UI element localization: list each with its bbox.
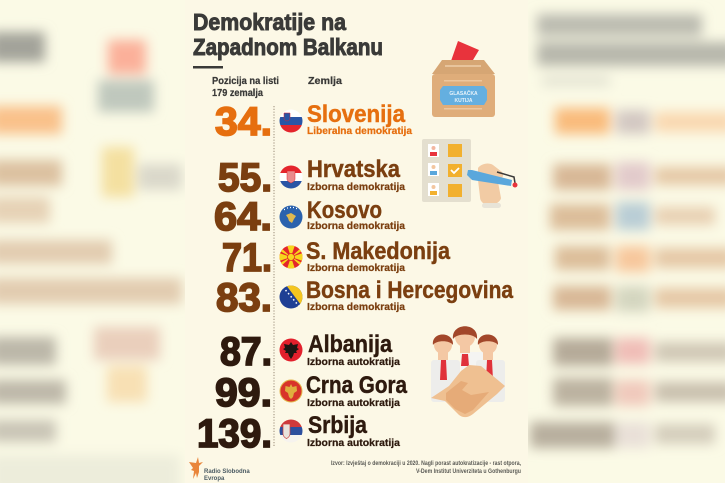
flag: Montenegro	[280, 380, 302, 402]
flag: Serbia	[280, 420, 302, 439]
country name: Hrvatska	[307, 156, 401, 183]
title rule	[193, 66, 223, 68]
regime type: Izborna autokratija	[307, 398, 400, 409]
rank 99: 99.	[215, 371, 272, 415]
flag: Croatia	[280, 166, 302, 188]
title: Demokratije na	[193, 9, 346, 35]
rank 55: 55.	[218, 156, 272, 200]
blurred backdrop: right	[530, 14, 725, 448]
icon: checklist and hand	[422, 139, 518, 208]
country name: Kosovo	[307, 197, 382, 224]
country name: Bosna i Hercegovina	[306, 277, 514, 304]
flag: North Macedonia	[280, 246, 302, 268]
row: Srbija	[198, 415, 400, 448]
country name: Crna Gora	[306, 372, 408, 399]
row: Hrvatska	[218, 159, 406, 192]
country name: Slovenija	[307, 101, 406, 128]
regime type: Izborna autokratija	[307, 357, 400, 368]
row: Albanija	[220, 330, 400, 374]
regime type: Izborna autokratija	[307, 438, 400, 449]
dotted divider	[273, 106, 275, 447]
regime type: Izborna demokratija	[307, 182, 405, 193]
regime type: Izborna demokratija	[307, 302, 405, 313]
title	[193, 9, 383, 60]
regime type: Izborna demokratija	[307, 263, 405, 274]
rank 87: 87.	[220, 330, 272, 374]
row: Crna Gora	[215, 371, 408, 415]
row: S. Makedonija	[222, 241, 450, 274]
country name: S. Makedonija	[306, 238, 451, 265]
column heading: position: 179 zemalja	[212, 88, 263, 99]
regime type: Liberalna demokratija	[307, 126, 412, 137]
flag: Slovenia	[280, 110, 302, 132]
rank 71: 71.	[222, 236, 272, 280]
title: Zapadnom Balkanu	[193, 34, 383, 60]
rank 83: 83.	[216, 276, 272, 320]
logo: Radio Slobodna Evropa: Radio Slobodna	[204, 469, 250, 475]
regime type: Izborna demokratija	[307, 221, 405, 232]
flag: Kosovo	[280, 206, 302, 228]
source note: V-Dem Institut Univerziteta u Gothenburgu	[416, 469, 521, 475]
icon: handshake team	[431, 326, 505, 417]
rank 139: 139.	[197, 412, 272, 456]
country name: Srbija	[308, 412, 368, 439]
column heading: country: Zemlja	[308, 75, 342, 87]
source note	[331, 461, 521, 475]
rank 64: 64.	[214, 195, 272, 239]
logo: Radio Slobodna Evropa	[189, 457, 250, 482]
blurred backdrop: left	[0, 32, 182, 483]
icon: ballot box	[432, 41, 495, 117]
flag: Bosnia and Herzegovina	[280, 286, 302, 308]
country name: Albanija	[308, 331, 393, 358]
flag: Albania	[280, 338, 302, 362]
rank 34: 34.	[215, 100, 272, 144]
source note: Izvor: Izvještaj o demokraciji u 2020. Nagli porast autokratizacije - rast otpora,	[331, 461, 521, 467]
logo: Radio Slobodna Evropa: Evropa	[204, 476, 225, 482]
row: Slovenija	[215, 104, 412, 136]
row: Kosovo	[214, 195, 405, 239]
icon: ballot box: GLASAČKA	[449, 90, 478, 97]
row: Bosna i Hercegovina	[216, 280, 514, 312]
panel: central infographic	[185, 0, 528, 483]
icon: ballot box: KUTIJA	[454, 98, 473, 104]
column heading: position: Pozicija na listi	[212, 76, 279, 87]
column heading: position	[212, 76, 279, 99]
